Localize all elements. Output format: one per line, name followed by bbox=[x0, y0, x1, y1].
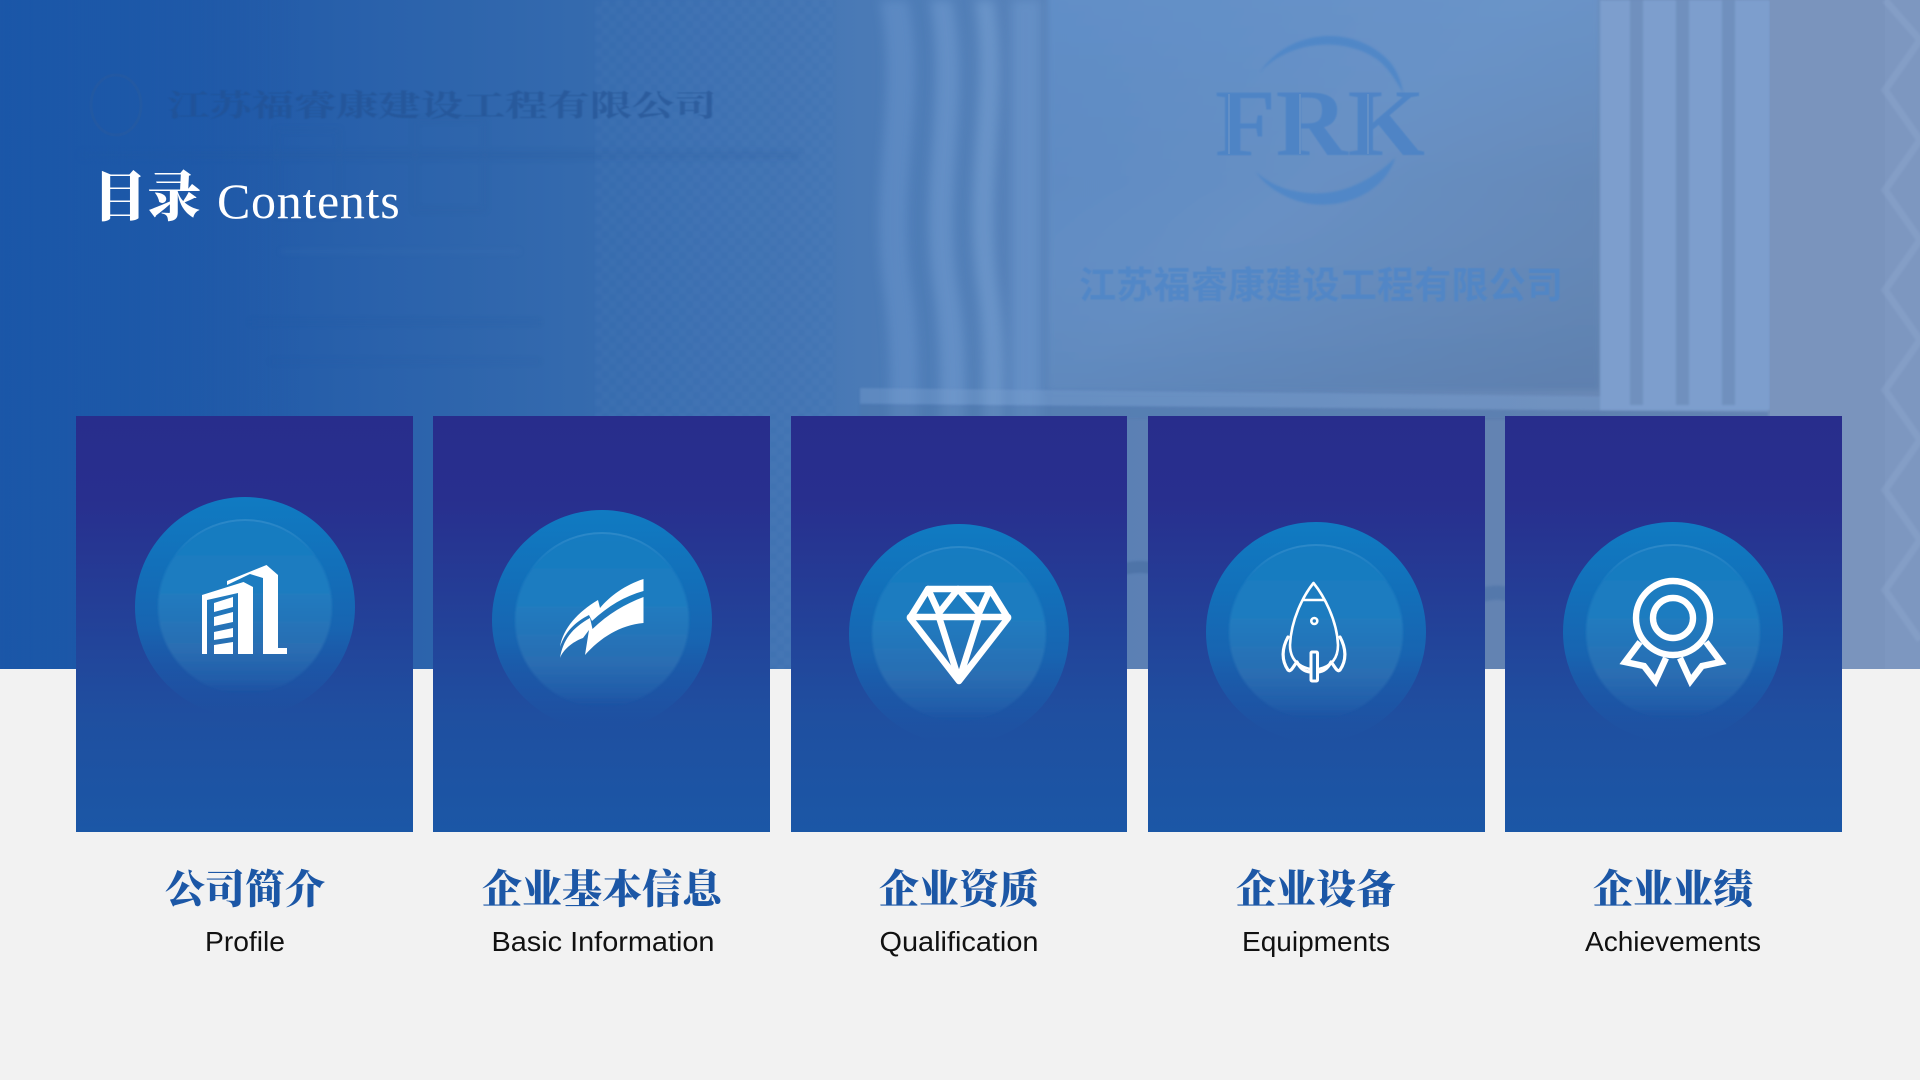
lower wall shading bbox=[840, 418, 1770, 669]
wavy column strips bbox=[879, 0, 1040, 669]
label: qualification: Qualification bbox=[880, 926, 1038, 957]
panel: profile card bbox=[76, 416, 413, 832]
icon: lightning swoosh bbox=[560, 579, 644, 658]
icon badge: profile bbox=[135, 497, 355, 717]
title: 目录 bbox=[93, 155, 201, 232]
label: profile bbox=[165, 867, 325, 957]
header photo band bbox=[0, 0, 1920, 679]
logo on wall: FRK bbox=[1215, 70, 1425, 176]
panel: equipments card bbox=[1148, 416, 1485, 832]
icon: building bbox=[202, 565, 287, 654]
label: qualification bbox=[879, 867, 1039, 957]
wall company name: 江苏福睿康建设工程有限公司 bbox=[1079, 265, 1563, 306]
background sign text bbox=[91, 75, 717, 135]
title: Contents bbox=[217, 173, 400, 229]
vertical strips right bbox=[1600, 0, 1770, 410]
icon badge: equipments bbox=[1206, 522, 1426, 742]
label: profile: 公司简介 bbox=[165, 867, 325, 912]
background sign text: 江苏福睿康建设工程有限公司 bbox=[167, 89, 717, 123]
icon badge: basic information bbox=[492, 510, 712, 730]
label: profile: Profile bbox=[205, 926, 285, 957]
zigzag pattern bbox=[1885, 0, 1920, 669]
label: basic information: 企业基本信息 bbox=[482, 867, 726, 912]
icon badge: qualification bbox=[849, 524, 1069, 744]
label: basic information bbox=[482, 867, 726, 957]
label: achievements: 企业业绩 bbox=[1593, 867, 1755, 912]
label: achievements bbox=[1585, 867, 1761, 957]
label: equipments: 企业设备 bbox=[1236, 867, 1396, 912]
label: equipments bbox=[1236, 867, 1396, 957]
icon: medal bbox=[1625, 581, 1721, 681]
label: qualification: 企业资质 bbox=[879, 867, 1039, 912]
panel: achievements card bbox=[1505, 416, 1842, 832]
logo on wall bbox=[1215, 36, 1425, 205]
checker panel bbox=[595, 0, 835, 669]
right panel bbox=[1770, 0, 1885, 669]
label: basic information: Basic Information bbox=[492, 926, 714, 957]
shelf edge bbox=[860, 388, 1768, 412]
left room details bbox=[80, 120, 800, 363]
icon badge: achievements bbox=[1563, 522, 1783, 742]
label: equipments: Equipments bbox=[1242, 926, 1390, 957]
panel: qualification card bbox=[791, 416, 1127, 832]
panel: basic information card bbox=[433, 416, 770, 832]
icon: rocket bbox=[1283, 583, 1345, 681]
left blue overlay bbox=[0, 0, 300, 669]
icon: diamond bbox=[910, 589, 1008, 681]
title bbox=[93, 155, 400, 232]
label: achievements: Achievements bbox=[1585, 926, 1761, 957]
wall sign panel bbox=[1048, 0, 1600, 390]
